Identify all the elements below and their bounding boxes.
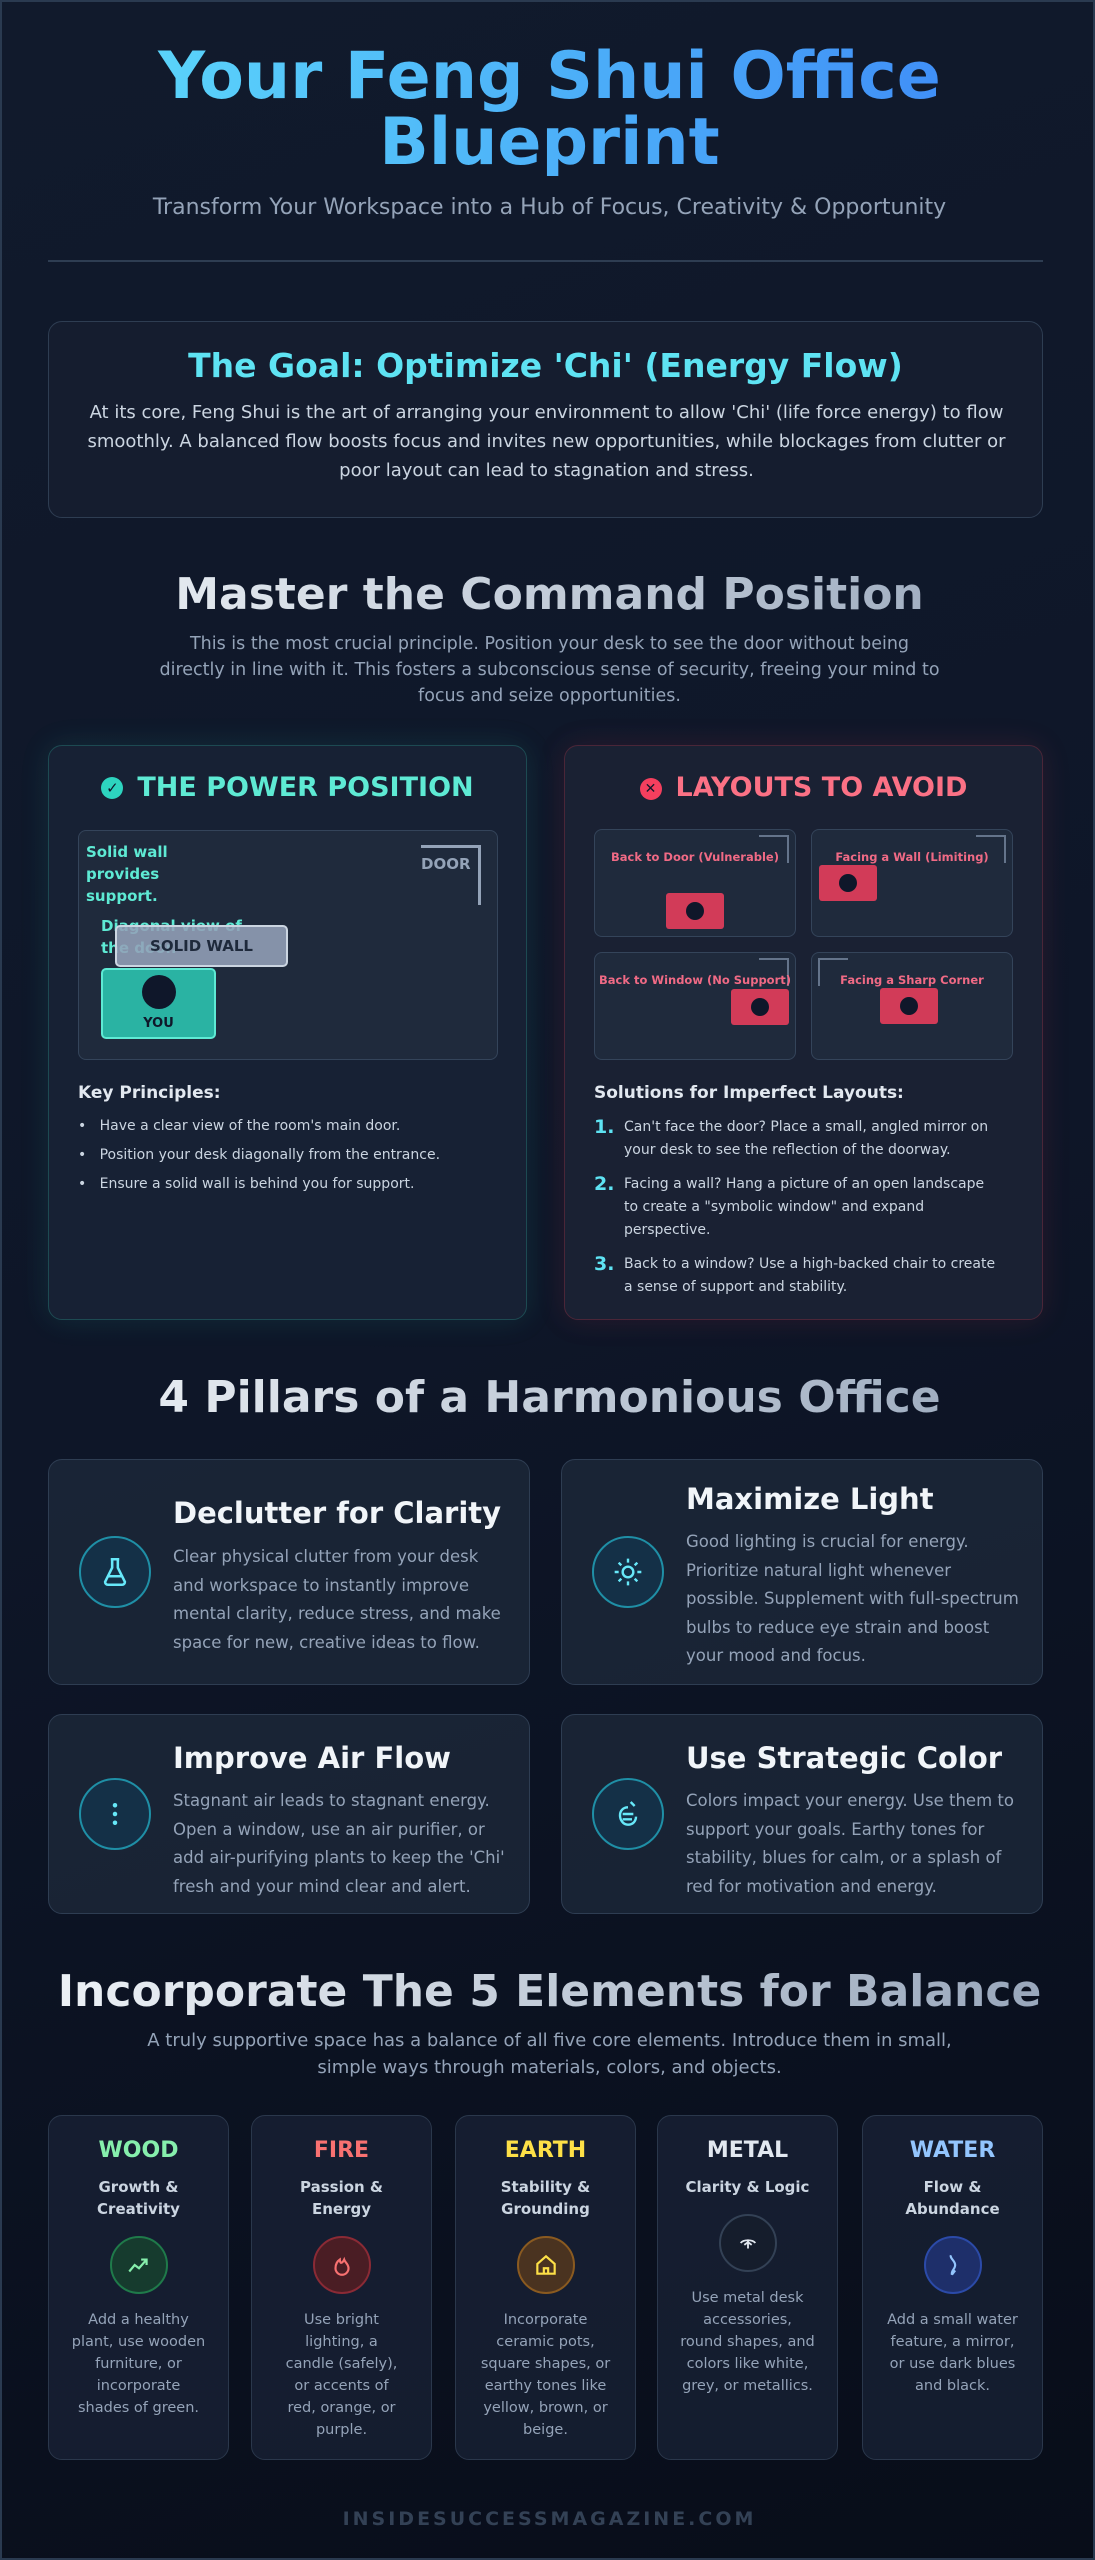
solutions: Solutions for Imperfect Layouts:	[594, 1083, 904, 1103]
layout: back to window	[594, 952, 796, 1060]
element: metal	[657, 2115, 838, 2460]
layout: back to door	[594, 829, 796, 937]
solutions: 3.	[594, 1253, 614, 1275]
icon: wave	[924, 2236, 982, 2294]
pillar: color: Colors impact your energy. Use them to support your goals. Earthy tones for stability, blues for calm, or a splash of red for motivation and energy.	[686, 1791, 1014, 1896]
heading: command position: Master the Command Position	[175, 569, 924, 620]
key principles: • Ensure a solid wall is behind you for support.	[78, 1176, 414, 1192]
label: solid wall	[86, 843, 168, 905]
power heading: ✓	[106, 779, 119, 797]
solutions	[594, 1083, 995, 1295]
layout: sharp corner	[811, 952, 1013, 1060]
solutions: Back to a window? Use a high-backed chair to create a sense of support and stability.	[624, 1256, 995, 1295]
label: diagonal	[101, 917, 242, 957]
pillar: light: Maximize Light	[686, 1482, 934, 1516]
element: earth: Grounding	[501, 2200, 590, 2218]
pillar: color: Use Strategic Color	[686, 1741, 1002, 1775]
subtitle: Transform Your Workspace into a Hub of Focus, Creativity & Opportunity	[153, 195, 946, 220]
heading: command position	[2, 569, 1095, 620]
heading: 4 pillars: 4 Pillars of a Harmonious Office	[158, 1372, 941, 1423]
goal text: At its core, Feng Shui is the art of arranging your environment to allow 'Chi' (life force energy) to flow smoothly. A balanced flow boosts focus and invites new opportunities, while blockages from clutter or poor layout can lead to stagnation and stress.	[87, 402, 1006, 481]
element: earth	[455, 2115, 636, 2460]
icon: dots	[79, 1778, 151, 1850]
layout: facing wall: Facing a Wall (Limiting)	[835, 850, 989, 864]
goal heading: The Goal: Optimize 'Chi' (Energy Flow)	[188, 346, 903, 385]
title: Your Feng Shui Office	[158, 39, 941, 114]
power heading: THE POWER POSITION	[137, 772, 474, 803]
diagram: power position: DOOR	[421, 855, 471, 873]
pillar: light	[561, 1459, 1043, 1685]
layout: sharp corner: Facing a Sharp Corner	[840, 973, 984, 987]
solutions: 2.	[594, 1173, 614, 1195]
key principles: • Have a clear view of the room's main door.	[78, 1118, 400, 1134]
element: water: Flow &	[924, 2178, 981, 2196]
label: diagonal: the door.	[101, 939, 177, 957]
title	[2, 44, 1095, 176]
command position intro: This is the most crucial principle. Position your desk to see the door without being directly in line with it. This fosters a subconscious sense of security, freeing your mind to focus and seize opportunities.	[159, 634, 940, 706]
icon: flask	[79, 1536, 151, 1608]
element: metal: METAL	[707, 2138, 788, 2163]
element: fire: Energy	[312, 2200, 371, 2218]
element: water: WATER	[910, 2138, 995, 2163]
avoid heading: ✕	[645, 781, 656, 797]
pillar: air: Improve Air Flow	[173, 1741, 451, 1775]
icon: metal	[719, 2214, 777, 2272]
icon: flame	[313, 2236, 371, 2294]
element: metal: Use metal desk accessories, round shapes, and colors like white, grey, or metallics.	[680, 2290, 815, 2394]
pillar: declutter: Declutter for Clarity	[173, 1496, 501, 1530]
label: solid wall: provides	[86, 865, 159, 883]
panel: goal	[48, 321, 1043, 518]
panel: power position	[48, 745, 527, 1320]
layout: back to window: Back to Window (No Support)	[599, 973, 791, 987]
key principles: Key Principles:	[78, 1083, 221, 1103]
solutions: Can't face the door? Place a small, angled mirror on your desk to see the reflection of the doorway.	[624, 1119, 988, 1158]
element: fire: FIRE	[314, 2138, 369, 2163]
element: wood: Growth &	[98, 2178, 179, 2196]
pillar: declutter	[48, 1459, 530, 1685]
element: fire: Passion &	[300, 2178, 383, 2196]
door	[421, 845, 481, 905]
icon: palette	[592, 1778, 664, 1850]
footer: INSIDESUCCESSMAGAZINE.COM	[343, 2508, 756, 2530]
element: metal: Clarity & Logic	[686, 2178, 809, 2196]
element: earth: EARTH	[505, 2138, 586, 2163]
element: wood: Creativity	[97, 2200, 180, 2218]
icon: growth	[110, 2236, 168, 2294]
title: Blueprint	[379, 105, 720, 180]
pillar: light: Good lighting is crucial for energy. Prioritize natural light whenever possible. Supplement with full-spectrum bulbs to reduce eye strain and boost your mood and focus.	[686, 1532, 1019, 1665]
element: fire	[251, 2115, 432, 2460]
element: wood: Add a healthy plant, use wooden furniture, or incorporate shades of green.	[72, 2312, 205, 2416]
avoid heading: LAYOUTS TO AVOID	[676, 772, 967, 803]
element: wood	[48, 2115, 229, 2460]
layout: facing wall	[811, 829, 1013, 937]
element: water	[862, 2115, 1043, 2460]
solid wall block	[115, 925, 288, 967]
diagram: power position	[78, 830, 498, 1060]
elements intro: A truly supportive space has a balance of all five core elements. Introduce them in small, simple ways through materials, colors, and objects.	[147, 2030, 952, 2078]
solutions: Facing a wall? Hang a picture of an open landscape to create a "symbolic window" and expand perspective.	[624, 1176, 984, 1238]
element: water: Add a small water feature, a mirror, or use dark blues and black.	[887, 2312, 1018, 2394]
pillar: air: Stagnant air leads to stagnant energy. Open a window, use an air purifier, or add air-purifying plants to keep the 'Chi' fresh and your mind clear and alert.	[173, 1791, 505, 1896]
desk: you: YOU	[143, 1016, 174, 1031]
element: wood: WOOD	[99, 2138, 178, 2163]
solid wall block: SOLID WALL	[150, 937, 253, 955]
element: fire: Use bright lighting, a candle (safely), or accents of red, orange, or purple.	[286, 2312, 397, 2438]
solutions: 1.	[594, 1116, 614, 1138]
element: earth: Stability &	[501, 2178, 590, 2196]
pillar: air	[48, 1714, 530, 1914]
icon: house	[517, 2236, 575, 2294]
icon: sun	[592, 1536, 664, 1608]
element: earth: Incorporate ceramic pots, square shapes, or earthy tones like yellow, brown, or beige.	[481, 2312, 610, 2438]
label: diagonal: Diagonal view of	[101, 917, 242, 935]
key principles: • Position your desk diagonally from the entrance.	[78, 1147, 440, 1163]
desk: you	[101, 968, 216, 1039]
label: solid wall: support.	[86, 887, 158, 905]
label: solid wall: Solid wall	[86, 843, 168, 861]
key principles	[78, 1083, 440, 1192]
pillar: declutter: Clear physical clutter from your desk and workspace to instantly improve mental clarity, reduce stress, and make space for new, creative ideas to flow.	[173, 1547, 501, 1652]
heading: 5 elements: Incorporate The 5 Elements for Balance	[58, 1966, 1041, 2017]
layout: back to door: Back to Door (Vulnerable)	[611, 850, 779, 864]
element: water: Abundance	[905, 2200, 1000, 2218]
pillar: color	[561, 1714, 1043, 1914]
panel: layouts to avoid	[564, 745, 1043, 1320]
